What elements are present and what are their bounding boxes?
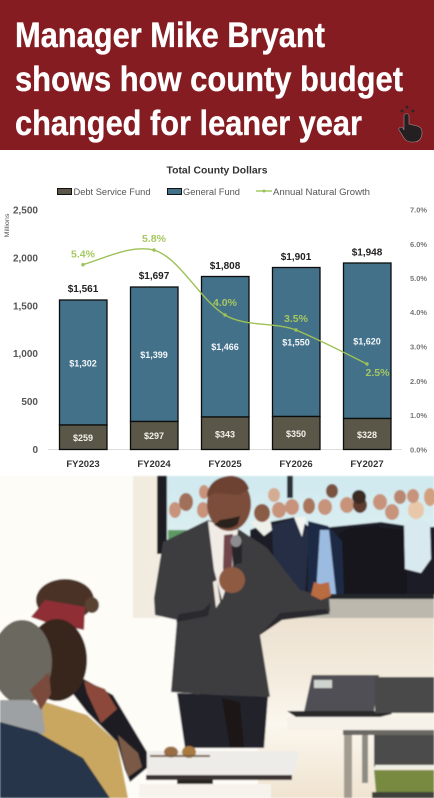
x axis labels: FY2025 [208, 459, 242, 470]
total labels: $1,561 [68, 284, 99, 295]
chart title: Total County Dollars [166, 164, 268, 176]
right axis labels: 3.0% [410, 342, 427, 352]
right axis labels: 0.0% [410, 446, 427, 454]
left axis labels [13, 206, 38, 456]
growth labels: 5.4% [71, 248, 96, 260]
left axis labels: 500 [21, 397, 38, 408]
total labels: $1,808 [210, 261, 241, 272]
general fund labels: $1,302 [69, 358, 97, 368]
legend: General Fund [183, 187, 240, 198]
bar FY2025 [202, 276, 249, 450]
chart: total county dollars [4, 164, 427, 470]
total labels: $1,697 [139, 271, 170, 282]
headline: changed for leaner year [15, 103, 362, 143]
general fund labels: $1,550 [282, 338, 310, 348]
total labels: $1,948 [352, 248, 383, 258]
right axis labels [410, 206, 427, 454]
headline: Manager Mike Bryant [15, 15, 325, 55]
bar FY2024 [130, 287, 178, 450]
right axis labels: 7.0% [410, 206, 427, 214]
growth labels: 5.8% [142, 233, 167, 245]
audience member in yellow cardigan [27, 619, 128, 798]
debt service labels: $328 [357, 430, 377, 440]
x axis labels: FY2024 [137, 459, 171, 470]
left axis labels: 2,500 [13, 206, 38, 216]
legend: Annual Natural Growth [273, 187, 370, 198]
audience member in patterned dress [31, 579, 147, 782]
bar FY2026 [272, 268, 320, 450]
icon: tapping hand [399, 106, 422, 142]
left axis labels: 2,000 [13, 254, 38, 264]
bar FY2023 [60, 300, 107, 450]
growth line [81, 248, 369, 366]
chair and right table [287, 677, 434, 798]
general fund labels: $1,466 [211, 342, 239, 352]
photo: manager presenting to audience [0, 476, 434, 798]
legend [58, 187, 370, 198]
left axis labels: 1,500 [13, 302, 38, 312]
right axis labels: 1.0% [410, 411, 427, 420]
total labels: $1,901 [281, 252, 312, 263]
x axis labels: FY2026 [279, 459, 313, 470]
presenter [154, 476, 331, 748]
right axis labels: 6.0% [410, 240, 427, 249]
total labels [68, 248, 383, 295]
right axis labels: 2.0% [410, 377, 427, 386]
debt service labels: $343 [215, 430, 235, 440]
debt service labels: $259 [73, 433, 93, 443]
general fund labels: $1,620 [353, 336, 381, 346]
growth labels: 2.5% [366, 367, 390, 379]
audience man in navy jacket [0, 620, 110, 798]
right axis labels: 4.0% [410, 308, 427, 317]
headline [15, 15, 403, 143]
x axis labels: FY2027 [350, 459, 384, 470]
stacked bars [60, 263, 391, 450]
x axis labels: FY2023 [66, 459, 100, 470]
debt service labels [73, 429, 377, 443]
bar FY2027 [344, 263, 391, 450]
debt service labels: $350 [286, 429, 306, 439]
left axis labels: 0 [32, 445, 38, 456]
display screen with group photo [157, 476, 434, 618]
header banner [0, 0, 434, 150]
growth labels [71, 233, 390, 379]
debt service labels: $297 [144, 431, 164, 441]
right axis labels: 5.0% [410, 274, 427, 283]
front table with hats [139, 746, 299, 798]
left axis unit: Millions [4, 213, 11, 238]
shirt and tie [208, 521, 238, 608]
growth labels: 4.0% [213, 297, 238, 309]
general fund labels: $1,399 [140, 350, 168, 360]
growth labels: 3.5% [284, 313, 309, 325]
legend: Debt Service Fund [74, 187, 150, 198]
x axis labels [66, 459, 384, 470]
laptop on right table [287, 675, 392, 717]
general fund labels [69, 336, 381, 368]
left axis labels: 1,000 [13, 349, 38, 360]
